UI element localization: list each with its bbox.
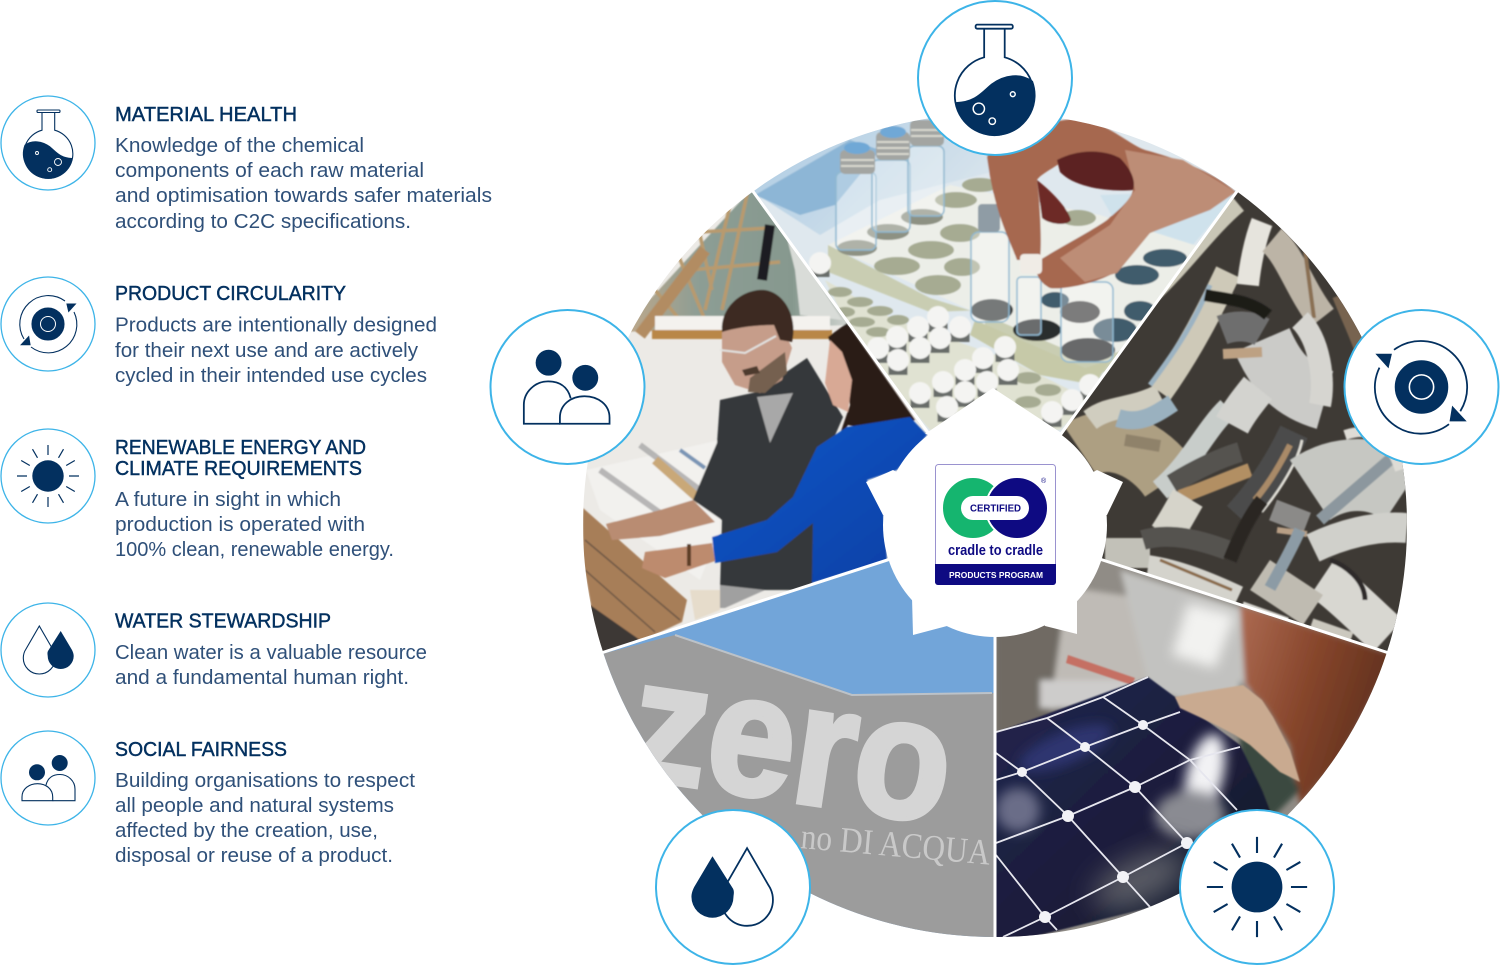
hand [987,118,1236,288]
man's arm [606,500,715,540]
description: product circularity: for their next use and are actively [115,340,418,362]
wedge dividers [598,190,1392,945]
small icon: circularity [1,277,95,371]
lower tray [825,280,1090,430]
photo: laboratory vials and hand [754,118,1236,432]
description: material health [115,135,492,233]
woman's face [825,340,852,412]
woman's hair [828,323,915,440]
heading: renewable energy: RENEWABLE ENERGY AND [115,437,366,459]
large icon: sun [1180,810,1334,964]
description: material health: according to C2C specifications. [115,211,411,233]
description: social fairness: all people and natural systems [115,795,394,817]
description: renewable energy: production is operated with [115,514,365,536]
white vial bodies [820,263,1090,427]
description: renewable energy: A future in sight in which [115,489,341,511]
solar panel [995,677,1285,945]
tray upper [830,186,1196,352]
heading: social fairness: SOCIAL FAIRNESS [115,739,287,761]
woman's sweater [712,417,927,583]
registered mark: ® [1041,477,1047,485]
description: material health: and optimisation towards safer materials [115,185,492,207]
logo wordmark: cradle to cradle [948,543,1043,559]
logo word: CERTIFIED: CERTIFIED [970,504,1021,514]
hand on panel [1175,685,1300,782]
banner word: zero: zero [619,623,965,860]
photo: zero banner against the sky [590,550,1000,945]
description: material health: components of each raw material [115,160,424,182]
holes olive [828,178,1096,408]
man's cardigan [693,358,843,590]
description: product circularity: Products are intentionally designed [115,314,437,336]
description: product circularity [115,314,437,387]
small icon: people [1,731,95,825]
photo: solar panel held by hand [990,560,1400,945]
photo: two people looking at material samples [583,192,928,651]
small icon: water drops [1,603,95,697]
description: water stewardship: and a fundamental human right. [115,667,409,689]
logo banner text: PRODUCTS PROGRAM [949,570,1043,580]
certification logo: Cradle to Cradle Certified [935,464,1056,585]
description: material health: Knowledge of the chemical [115,135,364,157]
large icon: water drops [656,810,810,964]
sample shelves [586,440,720,580]
heading: renewable energy: CLIMATE REQUIREMENTS [115,458,362,480]
photo collage wheel [570,100,1420,945]
holes dark [971,249,1187,362]
small icon: flask [1,96,95,190]
large icon: circularity [1344,310,1498,464]
description: social fairness: disposal or reuse of a product. [115,845,393,867]
list item: material health [1,96,492,233]
description: social fairness: affected by the creation, use, [115,820,378,842]
description: water stewardship [115,642,427,689]
man's head [722,322,792,393]
list item: social fairness [1,731,415,867]
large icon: flask [918,1,1072,155]
woman's arm [642,543,715,578]
heading: water stewardship: WATER STEWARDSHIP [115,610,331,632]
description: social fairness [115,770,415,867]
white caps [820,263,1090,412]
heading: renewable energy [115,437,366,480]
description: social fairness: Building organisations to respect [115,770,415,792]
description: renewable energy: 100% clean, renewable energy. [115,539,394,561]
wood boards [583,508,687,655]
large icon: people [490,310,644,464]
description: renewable energy [115,489,394,561]
heading: material health: MATERIAL HEALTH [115,104,297,126]
description: product circularity: cycled in their intended use cycles [115,365,427,387]
man's shirt [757,393,793,443]
description: water stewardship: Clean water is a valuable resource [115,642,427,664]
small icon: sun [1,429,95,523]
list item: water stewardship [1,603,427,697]
list item: renewable energy [1,429,394,561]
clear vials [836,146,1113,362]
list item: product circularity [1,277,437,387]
heading: product circularity: PRODUCT CIRCULARITY [115,283,346,305]
central white star badge [866,388,1123,637]
banner words: DI ACQUA: no DI ACQUA [799,816,992,873]
photo: shredded ribbon waste [1062,192,1407,651]
